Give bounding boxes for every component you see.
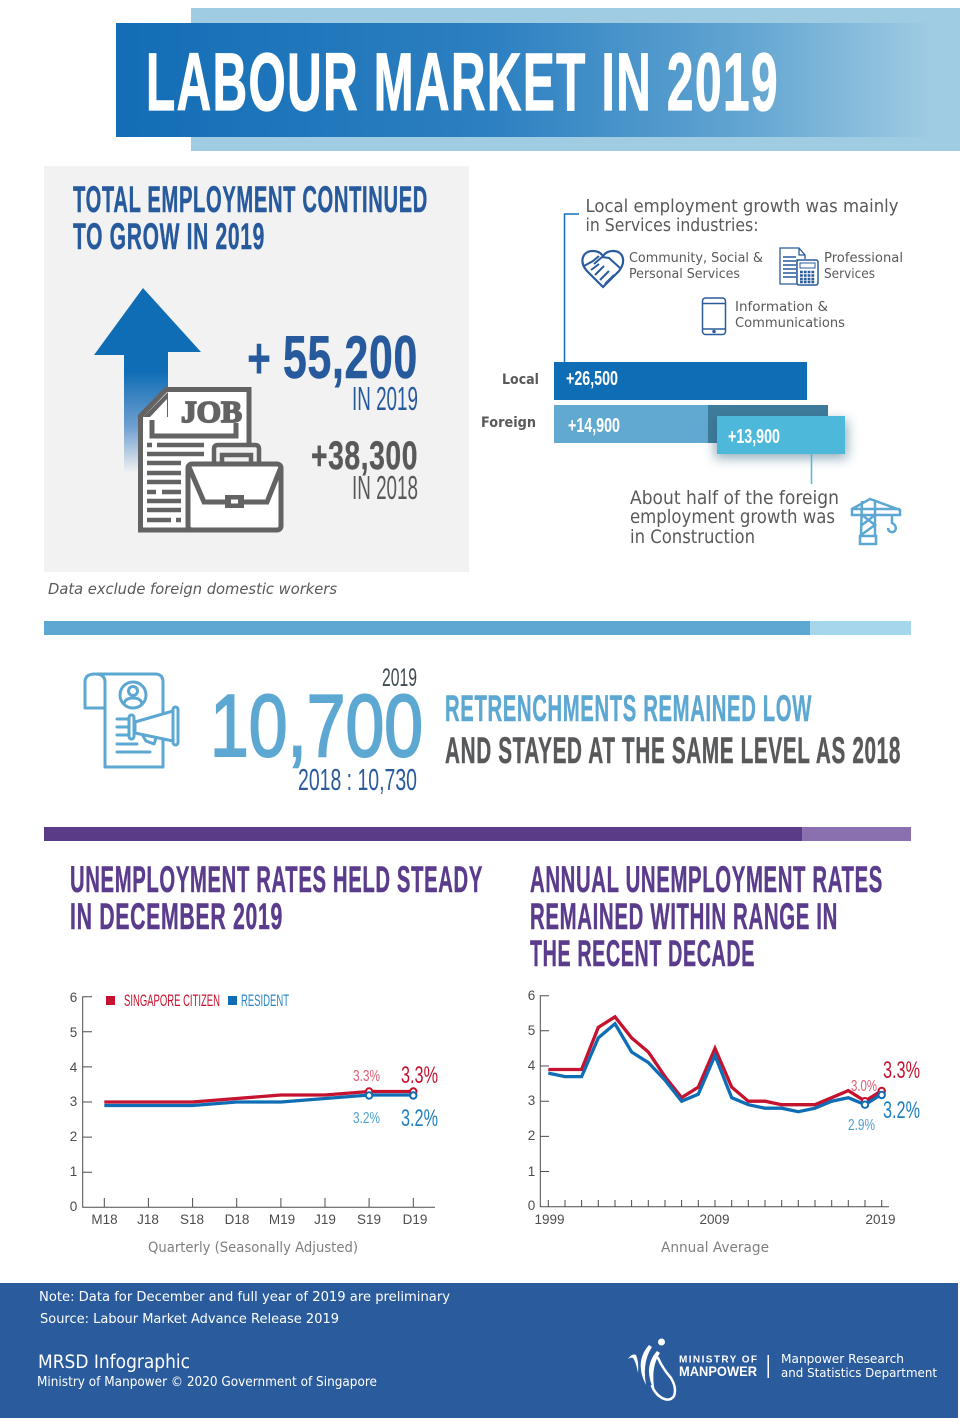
legend: SINGAPORE CITIZEN [124,991,220,1010]
series: resident [104,1092,417,1106]
connector: construction [810,454,812,484]
note and source [39,1289,450,1327]
x axis labels: 2019 [865,1212,896,1227]
x axis labels: D18 [225,1212,249,1227]
legend: RESIDENT [241,991,289,1010]
value labels: 3.2% [353,1110,380,1127]
x axis labels: M18 [91,1212,118,1227]
x axis labels [534,1212,896,1227]
note and source: Source: Labour Market Advance Release 2019 [40,1311,339,1327]
stat: 2019 employment change [247,324,418,417]
x axis labels: M19 [269,1212,295,1227]
series: resident [548,1024,885,1112]
text: construction note [630,487,839,548]
panel: local and foreign growth [481,197,903,548]
y axis labels: 3 [70,1094,77,1109]
divider bar: blue [44,621,911,635]
text: local employment note [586,197,898,236]
bar: local [554,362,807,400]
x axis labels: D19 [403,1212,427,1227]
y axis labels: 6 [70,990,77,1005]
x axis labels: 2009 [699,1212,730,1227]
bar: foreign construction: +13,900 [728,426,780,448]
y axis labels: 6 [528,988,535,1003]
stat: 2019 employment change: 55,200 [283,324,418,391]
note and source: Note: Data for December and full year of 2019 are preliminary [39,1289,450,1305]
logo: ministry of manpower: MINISTRY OF [679,1354,757,1366]
text: information and communications [735,299,845,331]
icon: construction crane [852,499,900,544]
y axis labels: 0 [528,1198,535,1213]
heading: unemployment rates [70,858,483,937]
stat: retrenchment number: 10,700 [210,676,423,775]
x axis labels: J18 [137,1212,159,1227]
line chart: annual unemployment [528,988,920,1256]
icon: document and calculator [780,248,818,285]
bar: foreign construction [715,416,847,458]
logo: ministry of manpower: Manpower Research [781,1351,904,1366]
text: construction note: About half of the foreign [630,487,839,509]
divider bar: purple [44,827,911,841]
y axis labels: 2 [528,1128,535,1143]
value labels [848,1057,920,1134]
footnote: data exclusion: Data exclude foreign domestic workers [48,580,337,598]
bar: local: +26,500 [566,368,618,390]
y axis labels: 5 [528,1023,535,1038]
x axis labels: S19 [357,1212,381,1227]
heading: annual unemployment rates: THE RECENT DECADE [530,932,755,974]
stat: 2019 employment change: IN 2019 [352,380,418,417]
icon: smartphone [702,298,726,334]
value labels: 2.9% [848,1117,875,1134]
y axis labels [528,988,536,1213]
credit [37,1352,377,1390]
heading: retrenchments [445,687,901,771]
credit: MRSD Infographic [38,1352,190,1373]
connector: local [564,214,579,362]
stat: 2019 employment change: + [247,326,271,391]
series: singapore citizen [104,1088,417,1102]
y axis labels: 2 [70,1129,77,1144]
value labels: 3.3% [401,1062,438,1089]
logo: ministry of manpower: MANPOWER [679,1363,757,1379]
heading: total employment: TOTAL EMPLOYMENT CONTINUED [73,178,428,220]
value labels: 3.3% [353,1068,380,1085]
text: construction note: employment growth was [630,506,835,528]
stat: 2018 employment change [311,434,418,506]
icon: handshake heart [582,251,623,287]
text: information and communications: Communications [735,315,845,331]
y axis labels: 3 [528,1093,535,1108]
value labels: 3.0% [851,1078,877,1095]
series: singapore citizen [548,1017,885,1105]
y axis labels [70,990,78,1214]
icon: job document and briefcase [140,390,281,530]
heading: total employment: TO GROW IN 2019 [73,215,265,257]
stat: 2018 employment change: IN 2018 [352,469,418,506]
text: community services: Personal Services [629,266,740,282]
text: community services: Community, Social & [629,250,763,266]
value labels: 3.2% [401,1105,438,1132]
x axis labels: 1999 [534,1212,565,1227]
stat: 2019 label: 2019 [382,664,417,692]
stat: 2018 comparison: 2018 : 10,730 [298,762,417,797]
value labels: 3.2% [883,1097,920,1124]
y axis labels: 1 [70,1164,77,1179]
icon: scroll with megaphone [85,674,178,767]
logo: ministry of manpower [628,1338,937,1400]
value labels: 3.3% [883,1057,920,1084]
text: construction note: in Construction [630,526,755,548]
bar: foreign [554,405,828,443]
label: local: Local [502,372,539,388]
heading: annual unemployment rates [530,858,883,974]
stat: 2018 employment change: +38,300 [311,434,418,478]
text: information and communications: Information & [735,299,828,315]
heading: total employment [73,178,428,257]
credit: Ministry of Manpower © 2020 Government of Singapore [37,1374,377,1390]
value labels [353,1062,438,1132]
label: foreign: Foreign [481,415,536,431]
text: local employment note: Local employment growth was mainly [586,197,898,217]
y axis labels: 4 [70,1060,78,1075]
line chart: quarterly unemployment [70,990,438,1256]
text: professional services: Services [824,266,875,282]
y axis labels: 4 [528,1058,536,1073]
heading: unemployment rates: UNEMPLOYMENT RATES HELD STEADY [70,858,483,900]
footer [0,1283,958,1418]
logo: ministry of manpower: and Statistics Department [781,1365,937,1380]
axis title: Annual Average [661,1240,769,1256]
x axis labels: J19 [314,1212,336,1227]
icon: job document and briefcase: JOB [181,394,242,429]
header banner [116,8,960,151]
y axis labels: 5 [70,1025,77,1040]
text: professional services: Professional [824,250,903,266]
text: community services [629,250,763,282]
x axis labels [91,1212,427,1227]
y axis labels: 1 [528,1164,535,1179]
axes [83,997,435,1207]
heading: unemployment rates: IN DECEMBER 2019 [70,895,283,937]
text: professional services [824,250,903,282]
text: local employment note: in Services industries: [586,216,758,236]
icon: up arrow [94,288,201,473]
axis title: Quarterly (Seasonally Adjusted) [148,1240,358,1256]
y axis labels: 0 [70,1199,77,1214]
x axis labels: S18 [180,1212,204,1227]
axes [540,996,889,1207]
panel: total employment [44,166,469,572]
bar: foreign: +14,900 [568,415,620,437]
panel: retrenchments [85,664,901,797]
